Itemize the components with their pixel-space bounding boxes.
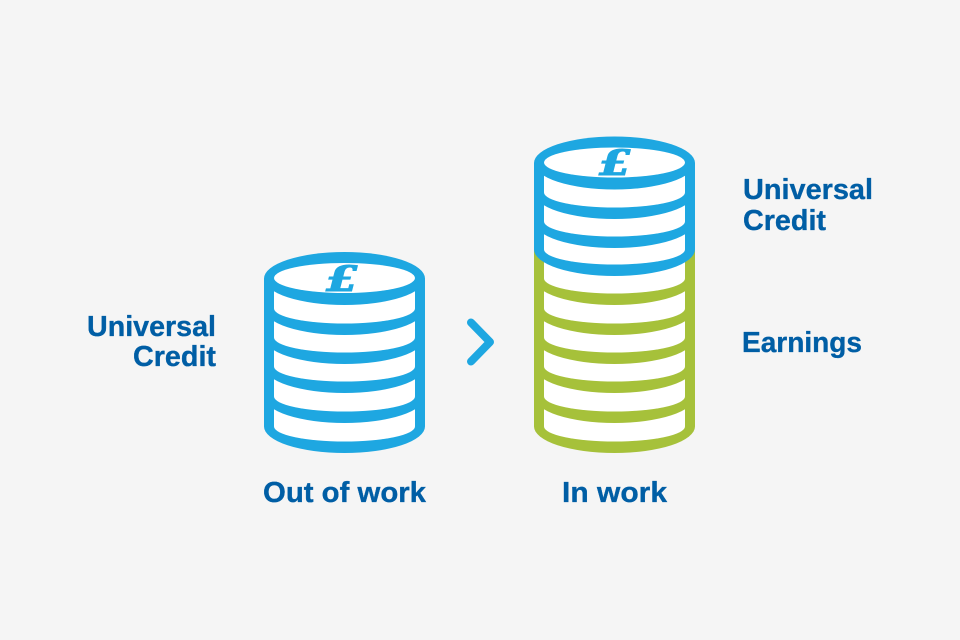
label: in work: In work [562,477,668,509]
coin stack: out of work [264,252,425,453]
universal credit coins [534,136,695,276]
icon: pound sign, in work: £ [599,143,631,184]
label: universal credit, right: Universal [743,174,873,206]
label: universal credit, right [743,174,873,237]
coin stack: in work [534,136,695,453]
label: universal credit, left [87,311,216,373]
label: universal credit, right: Credit [743,205,826,237]
label: universal credit, left: Credit [133,341,216,373]
label: earnings: Earnings [742,327,862,359]
icon: pound sign, out of work: £ [326,259,358,300]
arrow [471,322,490,362]
label: out of work: Out of work [263,477,427,509]
earnings coins [534,250,695,453]
label: universal credit, left: Universal [87,311,216,343]
